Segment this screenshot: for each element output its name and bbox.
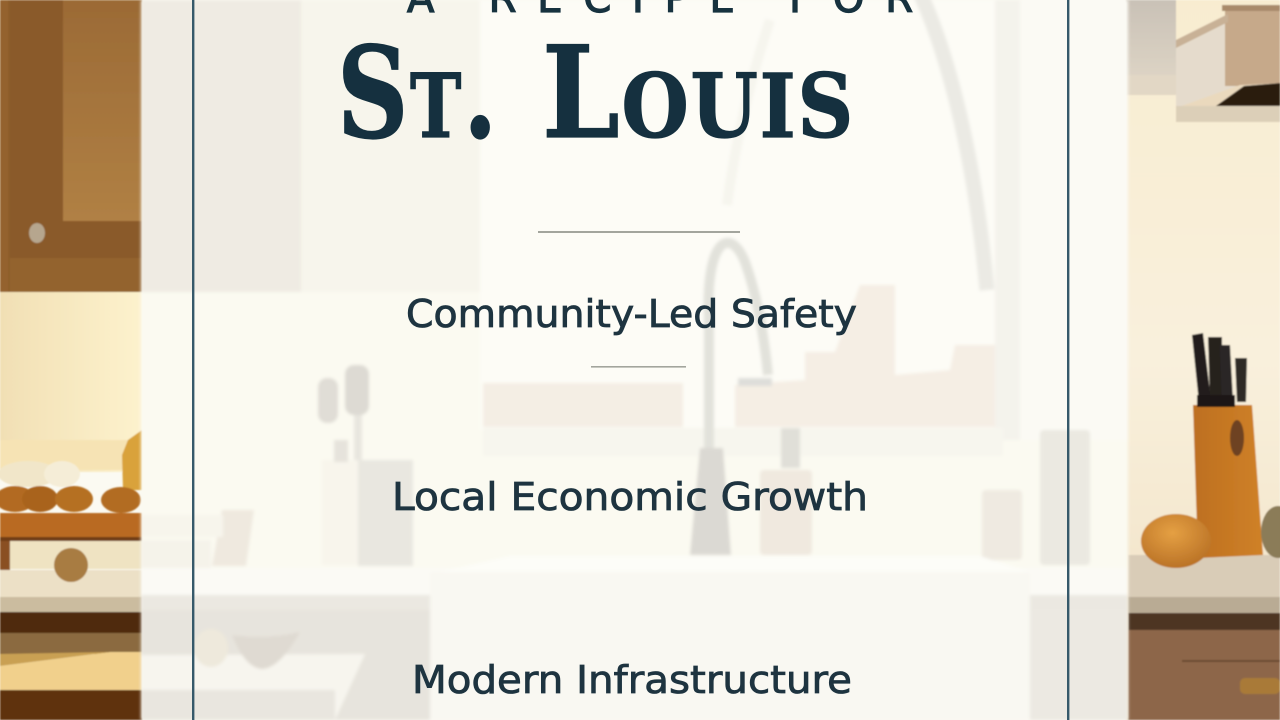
item: Local Economic Growth: Local Economic Growth [392, 475, 868, 519]
icon: bread loaf [1141, 514, 1211, 568]
washed-out bottles [982, 430, 1090, 565]
washed-out counter and sink [141, 556, 1128, 720]
icon: cabinet knob [29, 223, 45, 243]
translucent central panel with washed-out sink scene [141, 0, 1128, 720]
washed-out utensil jar [318, 365, 413, 566]
bowls of food on tray [0, 430, 142, 513]
washed-out faucet [690, 243, 772, 555]
item: Community-Led Safety: Community-Led Safety [406, 292, 857, 336]
title: St. Louis [337, 19, 855, 167]
frame line left [192, 0, 194, 720]
frame line right [1067, 0, 1069, 720]
icon: round gourd [1261, 506, 1280, 558]
icon: round fruit [54, 548, 88, 582]
icon: knife block [1192, 333, 1263, 558]
title: St. Louis: St. [337, 19, 499, 167]
range hood [1176, 5, 1280, 122]
item: Modern Infrastructure: Modern Infrastructure [412, 658, 852, 702]
right kitchen scene [1126, 0, 1280, 720]
divider under title [538, 231, 740, 233]
washed-out soap bottle [760, 428, 812, 555]
washed-out window and Gateway Arch [480, 0, 1003, 456]
left kitchen scene [0, 0, 142, 720]
title: St. Louis: Louis [542, 19, 855, 167]
icon: drawer handle [1240, 678, 1280, 694]
divider under first item [591, 366, 686, 368]
